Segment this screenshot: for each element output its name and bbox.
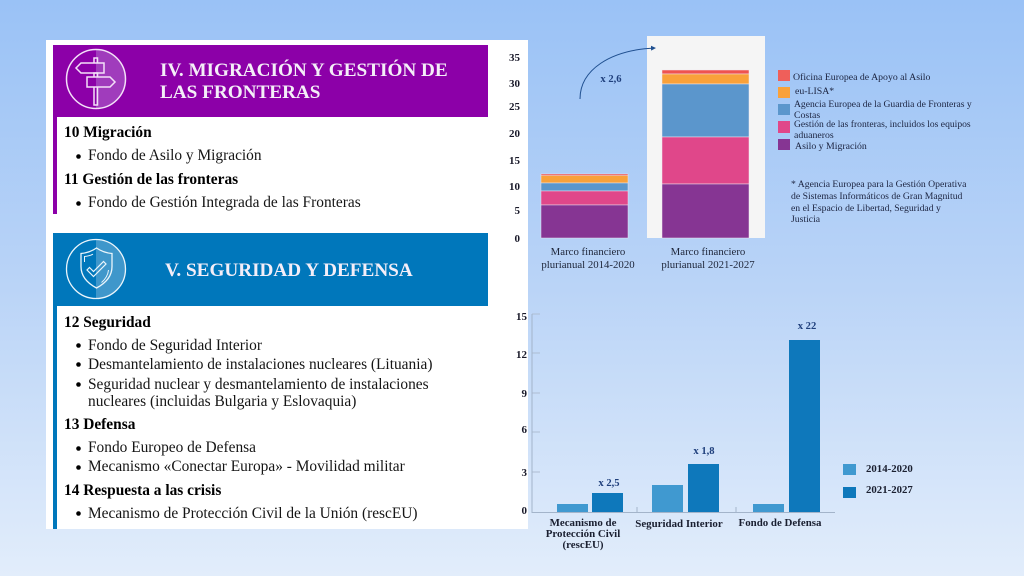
text block: border management: Fondo de Gestión Integrada de las Fronteras (88, 194, 361, 211)
group: internal security: Seguridad Interior (635, 518, 723, 530)
text block: crisis response: Mecanismo de Protección Civil de la Unión (rescEU) (88, 505, 418, 522)
category label 2014-2020 (541, 246, 635, 271)
axis labels: 6 (522, 424, 528, 436)
legend: stacked chart: Oficina Europea de Apoyo al Asilo (793, 72, 930, 83)
text block: border management (64, 171, 361, 211)
panel: budget headings (46, 40, 528, 529)
legend: stacked chart: Asilo y Migración (795, 141, 867, 152)
group: rescEU: Mecanismo de (550, 517, 617, 529)
panel: IV migration and borders (53, 45, 488, 214)
text block: defence (64, 416, 405, 475)
axis labels: 15 (516, 311, 528, 323)
legend: stacked chart: Costas (794, 110, 820, 121)
heading: IV: IV. MIGRACIÓN Y GESTIÓN DE (160, 59, 448, 81)
text block: crisis response: 14 Respuesta a las crisis (64, 482, 221, 499)
text block: defence: Mecanismo «Conectar Europa» - Movilidad militar (88, 458, 405, 475)
axis labels: 0 (514, 233, 520, 245)
axis labels: 35 (509, 52, 520, 64)
arrow: growth (580, 48, 655, 99)
text block: defence: 13 Defensa (64, 416, 136, 433)
heading: V: V. SEGURIDAD Y DEFENSA (165, 260, 413, 281)
axis labels (509, 52, 520, 245)
axis labels: 3 (522, 467, 528, 479)
axis labels: 5 (514, 205, 520, 217)
chart: stacked bars migration and borders (509, 36, 765, 271)
axis labels: 9 (522, 388, 528, 400)
group: defence fund: x 22 (798, 321, 816, 332)
panel: V security and defence (53, 233, 488, 529)
group: internal security: x 1,8 (693, 446, 715, 457)
axis labels: 0 (522, 505, 528, 517)
footnote: en el Espacio de Libertad, Seguridad y (791, 203, 941, 214)
footnote: Justicia (791, 214, 821, 225)
category label 2021-2027: Marco financiero (671, 246, 745, 258)
legend: stacked chart: Gestión de las fronteras, incluidos los equipos (794, 119, 971, 130)
text block: security: Seguridad nuclear y desmantelamiento de instalaciones (88, 376, 429, 393)
text block: security: Fondo de Seguridad Interior (88, 337, 262, 354)
chart: security and defence bars (516, 311, 835, 551)
group: rescEU: Protección Civil (546, 528, 620, 540)
text block: defence: Fondo Europeo de Defensa (88, 439, 256, 456)
category label 2014-2020: Marco financiero (551, 246, 625, 258)
group: internal security (635, 446, 723, 530)
legend: stacked chart (778, 70, 972, 152)
icon: shield with check (66, 240, 126, 298)
group: rescEU (546, 478, 623, 551)
group: rescEU: x 2,5 (598, 478, 620, 489)
text block: crisis response (64, 482, 418, 522)
legend: stacked chart: Agencia Europea de la Guardia de Fronteras y (794, 99, 972, 110)
legend: stacked chart: aduaneros (794, 130, 834, 141)
axis labels (516, 311, 528, 517)
group: defence fund (739, 321, 822, 529)
bar 2021-2027 (662, 70, 749, 238)
text block: migration: 10 Migración (64, 124, 152, 141)
text block: security (64, 314, 432, 410)
text block: border management: 11 Gestión de las fronteras (64, 171, 238, 188)
footnote (791, 179, 967, 225)
category label 2021-2027: plurianual 2021-2027 (661, 259, 755, 271)
bar 2014-2020 (541, 174, 628, 238)
legend: periods: 2014-2020 (866, 463, 913, 475)
text block: migration: Fondo de Asilo y Migración (88, 147, 262, 164)
axis labels: 20 (509, 128, 520, 140)
heading: IV: LAS FRONTERAS (160, 82, 320, 103)
axis labels: 10 (509, 181, 520, 193)
axis labels: 12 (516, 349, 528, 361)
legend: periods (843, 463, 913, 498)
text block: migration (64, 124, 262, 164)
group: rescEU: (rescEU) (563, 539, 604, 551)
heading: IV (160, 59, 448, 103)
text block: security: nucleares (incluidas Bulgaria y Eslovaquia) (88, 393, 356, 410)
icon: signpost (66, 50, 126, 108)
axis labels: 30 (509, 78, 520, 90)
group: defence fund: Fondo de Defensa (739, 517, 822, 529)
category label 2021-2027 (661, 246, 755, 271)
legend: stacked chart: eu-LISA* (795, 86, 834, 97)
axis labels: 25 (509, 101, 520, 113)
category label 2014-2020: plurianual 2014-2020 (541, 259, 635, 271)
text block: security: Desmantelamiento de instalaciones nucleares (Lituania) (88, 356, 432, 373)
axis labels: 15 (509, 155, 520, 167)
multiplier: x 2,6 (600, 74, 622, 85)
footnote: de Sistemas Informáticos de Gran Magnitud (791, 191, 963, 202)
legend: periods: 2021-2027 (866, 484, 913, 496)
footnote: * Agencia Europea para la Gestión Operativa (791, 179, 967, 190)
text block: security: 12 Seguridad (64, 314, 151, 331)
